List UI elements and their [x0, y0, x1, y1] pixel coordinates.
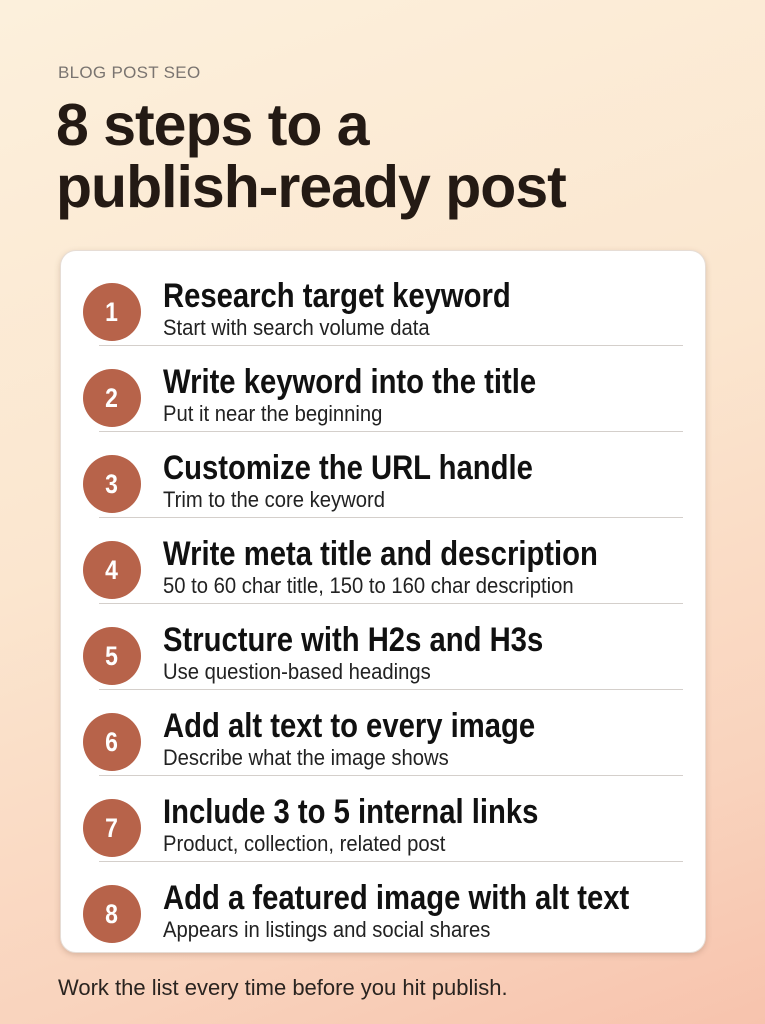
step 3: Trim to the core keyword	[163, 487, 385, 512]
title	[56, 92, 566, 220]
step 6: Describe what the image shows	[163, 745, 449, 770]
step 8: 8	[106, 899, 118, 929]
step 1: Research target keyword	[163, 277, 511, 315]
step 1: Start with search volume data	[163, 315, 430, 340]
step 8: Add a featured image with alt text	[163, 879, 629, 917]
step 6	[83, 707, 535, 771]
footer note: Work the list every time before you hit publish.	[58, 975, 508, 1000]
step 7: 7	[106, 813, 118, 843]
step 3	[83, 449, 533, 513]
step 1: 1	[106, 297, 118, 327]
step 6: 6	[106, 727, 118, 757]
step 2: Write keyword into the title	[163, 363, 536, 401]
step 7	[83, 793, 538, 857]
step 2	[83, 363, 536, 427]
title: publish-ready post	[56, 154, 566, 220]
step 8: Appears in listings and social shares	[163, 917, 490, 942]
eyebrow label: BLOG POST SEO	[58, 63, 200, 82]
step 5	[83, 621, 543, 685]
step 7: Product, collection, related post	[163, 831, 445, 856]
step 6: Add alt text to every image	[163, 707, 535, 745]
panel: checklist card	[60, 250, 706, 953]
step 5: Structure with H2s and H3s	[163, 621, 543, 659]
step 7: Include 3 to 5 internal links	[163, 793, 538, 831]
step 4: 4	[106, 555, 118, 585]
step 5: Use question-based headings	[163, 659, 431, 684]
step 5: 5	[106, 641, 118, 671]
step 2: Put it near the beginning	[163, 401, 382, 426]
step 4	[83, 535, 598, 599]
step 4: 50 to 60 char title, 150 to 160 char description	[163, 573, 574, 598]
step 3: Customize the URL handle	[163, 449, 533, 487]
step 8	[83, 879, 629, 943]
step 1	[83, 277, 511, 341]
step 3: 3	[106, 469, 118, 499]
step 4: Write meta title and description	[163, 535, 598, 573]
step 2: 2	[106, 383, 118, 413]
title: 8 steps to a	[56, 92, 369, 158]
